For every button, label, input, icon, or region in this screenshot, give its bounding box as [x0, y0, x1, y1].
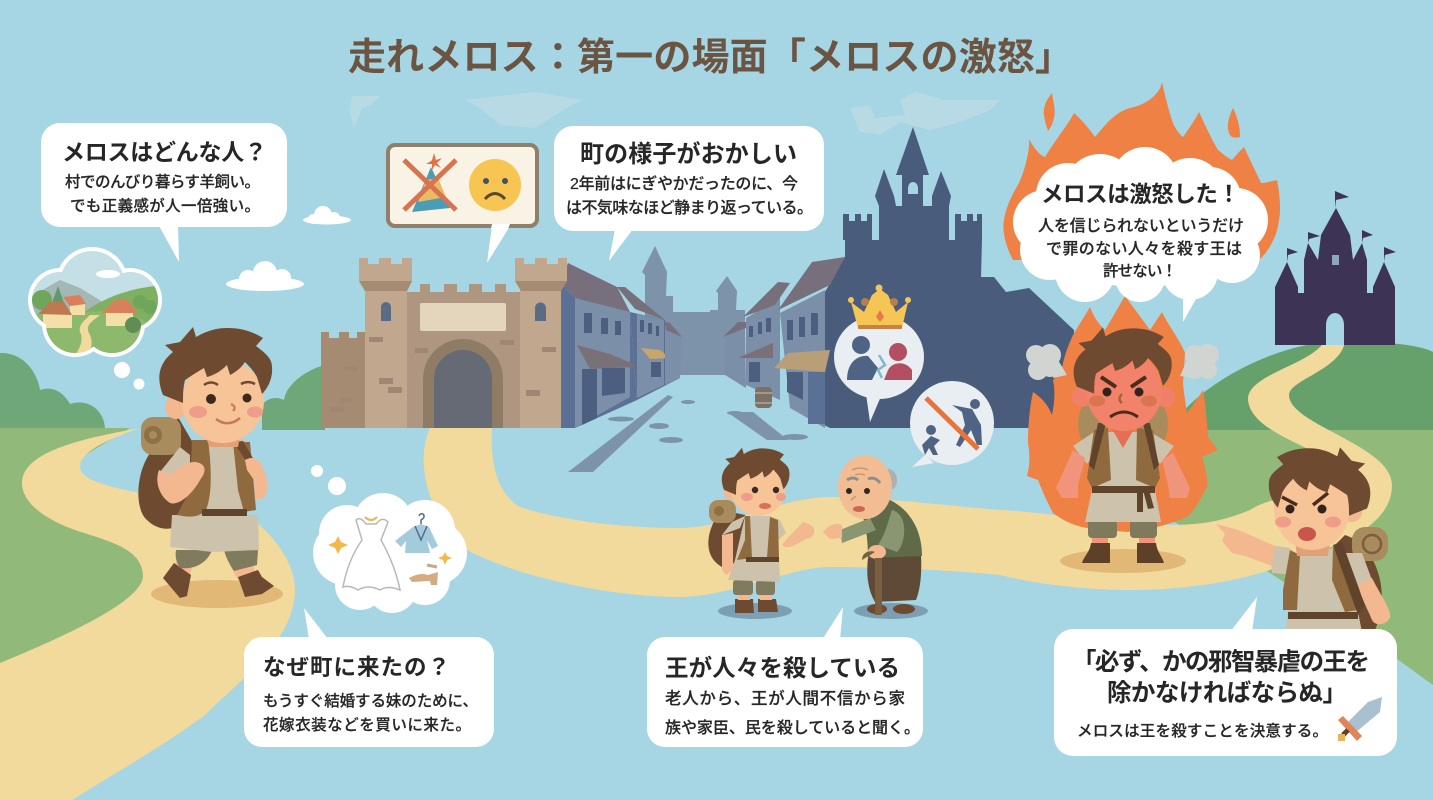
- backpack: [138, 417, 207, 529]
- decorative pale clouds: [350, 92, 1000, 135]
- cloud speech bubble: Melos is furious: 人を信じられないというだけ: [1038, 217, 1244, 235]
- icon: sword: [1338, 697, 1382, 741]
- speech bubble: Melos's resolve: [1054, 597, 1397, 756]
- old man: [823, 455, 928, 619]
- speech bubble: the town is strange: [554, 126, 824, 261]
- winding sand road: [424, 342, 1392, 597]
- speech bubble: why came to town: もうすぐ結婚する妹のために、: [263, 692, 478, 710]
- shadow: [151, 580, 283, 608]
- dark blue castle silhouette: [825, 127, 1074, 428]
- smoke puffs: [1026, 344, 1219, 380]
- cloud speech bubble: Melos is furious: [1013, 147, 1268, 322]
- speech bubble: the king kills people: 老人から、王が人間不信から家: [665, 688, 905, 708]
- purple castle on hill: [1275, 191, 1396, 345]
- speech bubble: why came to town: [244, 608, 494, 747]
- right meadow: [1170, 430, 1433, 685]
- cloud speech bubble: Melos is furious: 許せない！: [1103, 262, 1177, 280]
- barrel: [755, 387, 772, 408]
- two people broken trust: [847, 336, 912, 380]
- legs: [172, 560, 256, 580]
- crown: [848, 284, 911, 329]
- jacket: [395, 514, 438, 553]
- left sand path: [0, 428, 295, 800]
- shorts: [176, 550, 212, 568]
- thought bubble: home village: [28, 247, 162, 357]
- right street buildings: [723, 257, 845, 428]
- hands: [157, 462, 205, 503]
- tunic: [200, 440, 245, 515]
- furious Melos: [1056, 327, 1190, 573]
- large cloud: [226, 261, 304, 291]
- speech bubble: the king kills people: 王が人々を殺している: [665, 654, 900, 681]
- thought bubble: wedding clothes: [313, 493, 467, 613]
- Melos walking: [138, 327, 283, 608]
- wedding dress: [343, 519, 400, 590]
- town gate: [321, 258, 567, 428]
- vest: [177, 440, 211, 517]
- left street buildings: [561, 263, 682, 428]
- speech bubble: Melos's resolve: 除かなければならぬ」: [1107, 679, 1347, 707]
- Melos questioning: [708, 448, 814, 619]
- head: [159, 327, 272, 447]
- determined Melos pointing: [1216, 447, 1390, 632]
- cloud speech bubble: Melos is furious: で罪のない人々を殺す王は: [1046, 240, 1242, 258]
- speech bubble: who is Melos: 村でのんびり暮らす羊飼い。: [65, 173, 260, 191]
- thought dots: [114, 362, 144, 390]
- speech bubble: why came to town: 花嫁衣装などを買いに来た。: [263, 716, 471, 734]
- speech bubble: the king kills people: 族や家臣、民を殺していると聞く。: [665, 719, 920, 737]
- distant bushes: [0, 353, 325, 430]
- sign bubble: no festivity, sad face: [388, 145, 537, 263]
- speech icon: killing people: [910, 381, 994, 467]
- speech bubble: the town is strange: は不気味なほど静まり返っている。: [566, 199, 813, 217]
- boots: [163, 563, 191, 598]
- speech bubble: who is Melos: でも正義感が人一倍強い。: [70, 196, 260, 215]
- title: 走れメロス：第一の場面「メロスの激怒」: [348, 37, 1073, 79]
- sparkles: [328, 536, 348, 554]
- speech bubble: the town is strange: 2年前はにぎやかだったのに、今: [570, 175, 798, 193]
- shoes: [409, 565, 438, 585]
- speech bubble: why came to town: なぜ町に来たの？: [263, 655, 450, 680]
- speech bubble: who is Melos: メロスはどんな人？: [62, 139, 267, 165]
- speech bubble: the town is strange: 町の様子がおかしい: [580, 140, 797, 168]
- party hat with cross: [404, 153, 456, 212]
- big flame around bubble: [1003, 82, 1280, 262]
- small cloud: [303, 206, 351, 224]
- left meadow: [0, 428, 150, 680]
- thought dots: [311, 465, 346, 495]
- right green hill: [1170, 342, 1433, 432]
- street: [565, 375, 830, 428]
- sad face: [469, 159, 521, 211]
- speech bubble: who is Melos: [41, 123, 287, 262]
- distant town silhouette: [642, 246, 745, 375]
- cloud speech bubble: Melos is furious: メロスは激怒した！: [1041, 182, 1240, 207]
- speech bubble: Melos's resolve: 「必ず、かの邪智暴虐の王を: [1072, 648, 1370, 676]
- body flame: [1027, 296, 1218, 532]
- street shadows: [568, 395, 808, 472]
- speech icon: distrust king: [834, 284, 924, 422]
- speech bubble: the king kills people: [647, 607, 923, 747]
- speech bubble: Melos's resolve: メロスは王を殺すことを決意する。: [1077, 722, 1328, 740]
